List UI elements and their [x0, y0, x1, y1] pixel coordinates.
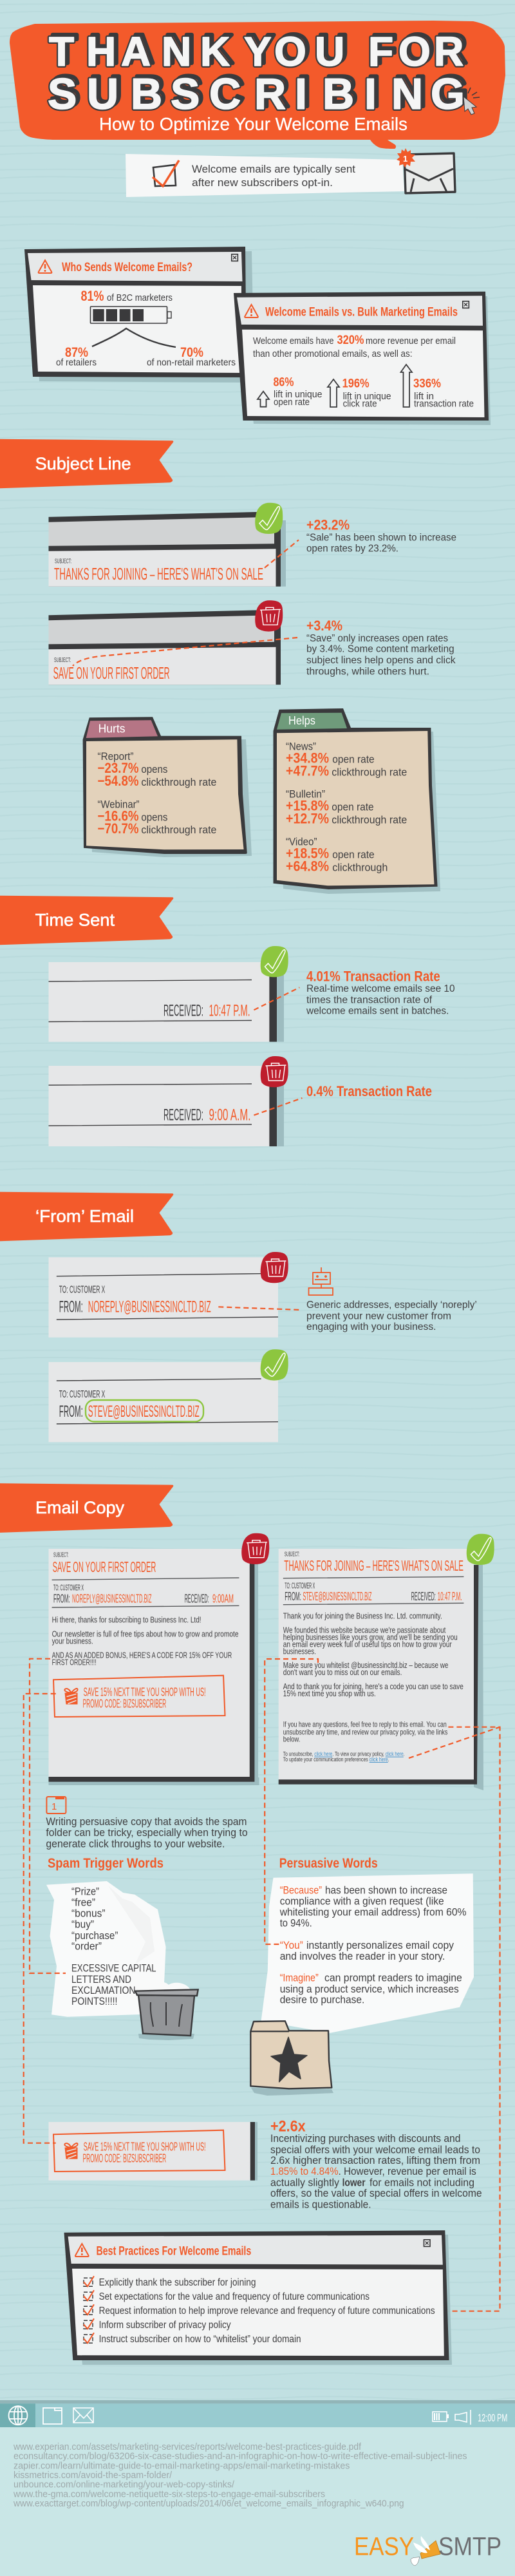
word list: “Prize” — [71, 1886, 99, 1898]
promo box: PROMO CODE: BIZSUBSCRIBER — [83, 1698, 166, 1710]
email body: Thank you for joining the Business Inc. Ltd. community. — [283, 1611, 442, 1620]
webinar stats: clickthrough rate — [141, 824, 216, 836]
incentive stat text: actually slightly — [270, 2177, 340, 2188]
email header — [52, 1552, 239, 1607]
because text: whitelisting your email address) from 60% — [279, 1907, 467, 1918]
addressing: FROM: — [59, 1298, 83, 1316]
email header: 9:00AM — [212, 1592, 234, 1605]
email header: TO: CUSTOMER X — [285, 1581, 315, 1591]
because text: compliance with a given request (like — [280, 1896, 444, 1908]
report stats: −23.7% — [98, 760, 139, 776]
email header: TO: CUSTOMER X — [53, 1582, 84, 1592]
note text: folder can be tricky, especially when trying to — [46, 1827, 248, 1839]
email body — [283, 1611, 464, 1763]
news stats: +34.8% — [286, 750, 329, 766]
sources — [13, 2441, 467, 2509]
email body: Make sure you whitelist @businessincltd.biz – because we — [283, 1661, 448, 1670]
news stats: +47.7% — [286, 762, 329, 779]
email header: NOREPLY@BUSINESSINCLTD.BIZ — [72, 1592, 152, 1605]
title line 2: SUBSCRIBING — [48, 70, 465, 118]
panel: sale subject line — [49, 503, 456, 587]
stat: 81% — [81, 288, 173, 304]
folder: hurts — [83, 717, 252, 857]
email body: don't want you to miss out on our emails. — [283, 1668, 402, 1677]
connector — [254, 1098, 302, 1115]
icon: cursor — [464, 88, 480, 115]
email body: below. — [283, 1735, 300, 1744]
stat text: “Save” only increases open rates — [306, 633, 448, 644]
checklist: Explicitly thank the subscriber for joining — [99, 2277, 256, 2288]
panel: received 10:47 PM — [49, 946, 455, 1042]
title line 1: THANK YOU FOR — [49, 28, 464, 75]
stat: 336% lift: 336% — [413, 377, 441, 391]
incentive stat text: lower — [342, 2177, 366, 2188]
addressing — [59, 1284, 211, 1316]
icon: checkbox — [153, 160, 179, 186]
icon: calendar: 1 — [52, 1801, 57, 1812]
video stats: “Video” — [286, 837, 317, 848]
callout: opt-in note — [126, 148, 455, 197]
stat: 70%: 70% — [180, 345, 203, 360]
panel: welcome vs bulk emails — [234, 292, 491, 425]
title line 2: SUBSCRIBING — [48, 70, 465, 118]
webinar stats: −70.7% — [98, 820, 139, 837]
checklist: Set expectations for the value and frequency of future communications — [99, 2291, 370, 2302]
email body — [52, 1615, 239, 1667]
email body: Hi there, thanks for subscribing to Business Inc. Ltd! — [52, 1615, 201, 1624]
incentive stat text: offers, so the value of special offers in welcome — [270, 2188, 482, 2199]
title line 1: THANK YOU FOR — [49, 28, 464, 75]
incentive stat text — [270, 2117, 482, 2210]
email header: SAVE ON YOUR FIRST ORDER — [53, 1558, 156, 1575]
word list: “bonus” — [71, 1908, 106, 1920]
incentive stat text: 2.6x higher transaction rates, lifting them from — [270, 2155, 480, 2166]
subject text: THANKS FOR JOINING – HERE'S WHAT'S ON SALE — [54, 564, 263, 583]
section banner: from email: ‘From’ Email — [35, 1206, 134, 1226]
promo box: SAVE 15% NEXT TIME YOU SHOP WITH US! — [84, 2140, 206, 2153]
email header: STEVE@BUSINESSINCLTD.BIZ — [303, 1590, 371, 1603]
stat text: 0.4% Transaction Rate — [306, 1083, 432, 1099]
logo: easy smtp: SMTP — [438, 2533, 501, 2561]
dashed connectors — [24, 1659, 500, 2311]
news stats: clickthrough rate — [332, 766, 407, 778]
icon: folder — [43, 2408, 62, 2424]
stat text — [306, 968, 455, 1016]
imagine text: using a product service, which increases — [280, 1984, 459, 1995]
stat text: times the transaction rate of — [306, 994, 433, 1005]
addressing: TO: CUSTOMER X — [59, 1389, 105, 1400]
email body: an email every week full of useful tips on how to grow your — [283, 1640, 452, 1649]
video stats: open rate — [332, 849, 375, 861]
section banner: email copy — [0, 1483, 173, 1533]
webinar stats: “Webinar” — [98, 799, 139, 810]
word list: “purchase” — [71, 1930, 118, 1942]
bulletin stats: +15.8% — [286, 797, 329, 813]
note text: Writing persuasive copy that avoids the spam — [46, 1816, 247, 1828]
promo box: SAVE 15% NEXT TIME YOU SHOP WITH US! — [84, 1685, 206, 1698]
stat text: throughs, while others hurt. — [306, 666, 429, 677]
webinar stats: opens — [141, 811, 167, 823]
connector — [73, 638, 297, 666]
email body: And to thank you for joining, here's a code you can use to save — [283, 1682, 464, 1691]
panel: best practices — [64, 2230, 452, 2365]
word list: “order” — [71, 1941, 102, 1953]
header speech bubble — [10, 21, 505, 149]
icon: green check — [261, 946, 288, 977]
word list: EXCESSIVE CAPITAL — [71, 1963, 156, 1975]
bulletin stats: open rate — [332, 801, 374, 813]
icon: green check — [467, 1534, 494, 1565]
you text: and involves the reader in your story. — [280, 1951, 445, 1962]
branching curve — [92, 328, 176, 347]
incentive stat text: Incentivizing purchases with discounts and — [270, 2133, 460, 2145]
icon: envelope with badge — [397, 148, 455, 193]
panel: personal address — [49, 1349, 288, 1442]
stat: 87%: 87% — [65, 345, 88, 360]
panel: noreply address: NOREPLY@BUSINESSINCLTD.BIZ — [88, 1298, 211, 1316]
incentive stat text: special offers with your welcome email leads to — [270, 2144, 480, 2155]
received label: RECEIVED: — [164, 1106, 203, 1124]
sources: econsultancy.com/blog/63206-six-case-studies-and-an-infographic-on-how-to-write-effective-email-subject-lines — [14, 2451, 467, 2462]
stat: 196% lift — [328, 377, 391, 410]
you text — [280, 1940, 454, 1962]
checklist: Inform subscriber of privacy policy — [99, 2320, 231, 2331]
stat: 86% lift: lift in unique — [274, 389, 322, 400]
icon: green check — [255, 503, 283, 534]
icon: winged envelope — [411, 2536, 440, 2566]
word list — [71, 1886, 156, 2007]
icon: robot — [309, 1267, 333, 1295]
email body: 15% next time you shop with us. — [283, 1689, 376, 1698]
revenue text: more revenue per email — [366, 336, 456, 346]
panel: save subject line — [49, 600, 456, 685]
email header: RECEIVED: — [185, 1592, 209, 1605]
imagine text: desire to purchase. — [280, 1994, 364, 2006]
explanation text: Generic addresses, especially ‘noreply’ — [306, 1300, 477, 1311]
stat text: Real-time welcome emails see 10 — [306, 983, 455, 994]
bulletin stats — [286, 788, 407, 826]
heading: Best Practices For Welcome Emails — [97, 2245, 251, 2259]
icon: warning — [245, 305, 258, 317]
because text: to 94%. — [280, 1918, 312, 1929]
panel: friendly email example: 10:47 P.M. — [438, 1590, 462, 1603]
stat text: subject lines help opens and click — [306, 655, 456, 666]
video stats: clickthrough — [332, 862, 388, 873]
sources: zapier.com/learn/ultimate-guide-to-email-marketing-apps/email-marketing-mistakes — [14, 2460, 350, 2471]
because text: “Because” — [280, 1885, 322, 1897]
email body: businesses. — [283, 1647, 316, 1656]
report stats: opens — [141, 764, 167, 775]
stat: 81%: of B2C marketers — [107, 292, 173, 303]
sources: www.the-gma.com/welcome-netiquette-six-steps-to-engage-email-subscribers — [13, 2488, 325, 2499]
note text: Welcome emails are typically sent — [192, 164, 355, 175]
promo box — [53, 2130, 225, 2172]
stat text: by 3.4%. Some content marketing — [306, 644, 454, 655]
email header — [283, 1551, 464, 1605]
stat text: +23.2% — [306, 517, 350, 533]
stat: 86% lift: 86% — [273, 375, 294, 389]
stat: 87% — [56, 345, 97, 368]
stat: 70%: of non-retail marketers — [147, 357, 236, 368]
stat text: “Sale” has been shown to increase — [306, 532, 456, 543]
heading: spam trigger words: Spam Trigger Words — [48, 1856, 164, 1871]
subject text — [53, 657, 170, 683]
icon: red bin — [261, 1056, 288, 1087]
note text: generate click throughs to your website. — [46, 1838, 225, 1850]
connector — [265, 540, 299, 568]
bulletin stats: +12.7% — [286, 810, 329, 826]
heading: Welcome Emails vs. Bulk Marketing Emails — [265, 306, 458, 319]
icon: envelope with badge: 1 — [403, 154, 407, 164]
title line 2: SUBSCRIBING — [51, 67, 468, 116]
incentive stat text: . However, revenue per email is — [339, 2166, 476, 2177]
news stats — [286, 741, 407, 779]
paper: persuasive words — [261, 1873, 474, 2033]
checklist: Instruct subscriber on how to “whitelist” your domain — [99, 2334, 301, 2345]
sources: www.experian.com/assets/marketing-services/reports/welcome-best-practices-guide.pdf — [13, 2441, 362, 2452]
subject text: SUBJECT: — [54, 657, 71, 664]
stat text: welcome emails sent in batches. — [306, 1005, 449, 1016]
logo: easy smtp — [354, 2533, 501, 2566]
sources: kissmetrics.com/avoid-the-spam-folder/ — [14, 2470, 173, 2481]
panel: who sends welcome emails — [24, 247, 254, 383]
incentive stat text: for emails not including — [370, 2177, 474, 2188]
bulletin stats: clickthrough rate — [332, 814, 407, 826]
panel: received 9:00 AM — [49, 1056, 432, 1146]
promo box — [53, 1676, 225, 1717]
email body: We founded this website because we're passionate about — [283, 1625, 446, 1634]
email header: FROM: — [285, 1590, 301, 1603]
email body: AND AS AN ADDED BONUS, HERE'S A CODE FOR 15% OFF YOUR — [52, 1651, 232, 1660]
news stats: “News” — [286, 741, 316, 752]
icon: star folder — [250, 2021, 333, 2096]
panel: personal address: STEVE@BUSINESSINCLTD.BIZ — [88, 1403, 200, 1421]
imagine text — [280, 1973, 462, 2006]
you text: “You” — [280, 1940, 303, 1951]
video stats — [286, 837, 388, 874]
stat: 86% lift — [258, 375, 322, 408]
stat: 87%: of retailers — [56, 357, 97, 368]
word list: EXCLAMATION — [71, 1985, 135, 1996]
checklist: Request information to help improve relevance and frequency of future communications — [99, 2306, 435, 2316]
promo box: PROMO CODE: BIZSUBSCRIBER — [83, 2152, 166, 2165]
panel: save subject line: SAVE ON YOUR FIRST ORDER — [53, 663, 170, 683]
section banner: time sent: Time Sent — [35, 911, 115, 930]
email header: SUBJECT: — [53, 1552, 68, 1559]
note text — [192, 164, 355, 189]
icon: close — [424, 2240, 430, 2246]
icon: trash can — [135, 1982, 198, 2040]
subject text — [54, 558, 263, 583]
subject text: SUBJECT: — [55, 558, 71, 565]
stat text — [306, 618, 456, 677]
connector — [218, 1307, 301, 1310]
stat text — [306, 517, 456, 554]
because text — [279, 1885, 467, 1929]
because text: has been shown to increase — [325, 1885, 447, 1897]
stat: 81%: 81% — [81, 288, 104, 304]
email body: your business. — [52, 1636, 93, 1645]
icon: red bin — [255, 600, 283, 632]
section banner: subject line: Subject Line — [35, 454, 131, 473]
revenue text — [253, 334, 456, 359]
section banner: time sent — [0, 896, 173, 945]
email body: FIRST ORDER!!!! — [52, 1658, 97, 1667]
panel: incentive offer — [49, 2122, 258, 2181]
tab label: Helps — [288, 714, 315, 727]
imagine text: “Imagine” — [280, 1973, 319, 1984]
word list: POINTS!!!!! — [71, 1996, 117, 2007]
icon: warning — [39, 260, 52, 273]
received label: RECEIVED: — [164, 1001, 203, 1019]
tab label: Hurts — [98, 722, 126, 735]
email body: To unsubscribe, click here. To view our privacy policy, click here. — [283, 1751, 405, 1758]
addressing: TO: CUSTOMER X — [59, 1284, 105, 1295]
panel: generic email example — [49, 1533, 269, 1785]
sources: www.exacttarget.com/blog/wp-content/uploads/2014/06/et_welcome_emails_infographic_w640.png — [13, 2498, 404, 2509]
report stats: −54.8% — [98, 773, 139, 789]
icon: close — [232, 254, 238, 261]
revenue text: Welcome emails have — [253, 336, 333, 346]
icon: warning — [75, 2244, 89, 2257]
taskbar — [0, 2400, 515, 2427]
bulletin stats: “Bulletin” — [286, 788, 325, 800]
connector — [254, 987, 299, 1010]
stat text: open rates by 23.2%. — [306, 544, 398, 554]
word list: LETTERS AND — [71, 1974, 131, 1985]
paper: spam words — [46, 1881, 166, 2017]
stat: 70% — [147, 345, 236, 368]
webinar stats — [98, 799, 216, 837]
video stats: +64.8% — [286, 858, 329, 874]
explanation text: engaging with your business. — [306, 1321, 436, 1332]
heading: Who Sends Welcome Emails? — [62, 261, 192, 274]
stat text: +3.4% — [306, 618, 342, 634]
report stats — [98, 751, 216, 789]
panel: noreply address — [49, 1252, 477, 1338]
video stats: +18.5% — [286, 846, 329, 862]
imagine text: can prompt readers to imagine — [324, 1973, 462, 1984]
revenue text: than other promotional emails, as well as: — [253, 348, 412, 359]
explanation text — [306, 1300, 477, 1332]
icon: battery — [90, 307, 171, 323]
email body: If you have any questions, feel free to reply to this email. You can — [283, 1720, 447, 1729]
stat: 196% lift: click rate — [343, 399, 377, 410]
footer background — [0, 2427, 515, 2576]
subtitle: How to Optimize Your Welcome Emails — [99, 114, 407, 134]
email body: unsubscribe any time, and review our privacy policy, via the links — [283, 1727, 447, 1736]
email body: Our newsletter is full of free tips about how to grow and promote — [52, 1629, 239, 1638]
sources: unbounce.com/online-marketing/your-web-copy-stinks/ — [14, 2479, 235, 2490]
news stats: open rate — [332, 753, 375, 765]
addressing: FROM: — [59, 1403, 83, 1421]
icon: calendar — [46, 1796, 66, 1814]
report stats: clickthrough rate — [141, 777, 216, 788]
heading: persuasive words: Persuasive Words — [279, 1856, 378, 1871]
title line 1: THANK YOU FOR — [52, 26, 467, 72]
intro note with calendar icon — [46, 1796, 248, 1850]
section banner: email copy: Email Copy — [35, 1498, 124, 1517]
icon: speaker — [455, 2410, 471, 2425]
email body: To update your communication preferences click here. — [283, 1756, 389, 1763]
note text: after new subscribers opt-in. — [192, 177, 333, 189]
word list: “buy” — [71, 1919, 94, 1931]
section banner: subject line — [0, 439, 173, 488]
stat: 196% lift: lift in unique — [343, 391, 391, 402]
icon: red bin — [241, 1533, 269, 1564]
addressing — [59, 1389, 200, 1421]
icon: envelope — [73, 2408, 93, 2423]
checklist — [84, 2276, 435, 2345]
received label: 10:47 P.M. — [209, 1001, 250, 1019]
stat: 336% lift: lift in — [414, 391, 434, 402]
report stats: “Report” — [98, 751, 134, 762]
email header: RECEIVED: — [411, 1590, 436, 1603]
incentive stat text: emails is questionable. — [270, 2199, 371, 2210]
logo: easy smtp: EASY — [354, 2533, 414, 2561]
revenue text: 320% — [337, 334, 364, 347]
you text: instantly personalizes email copy — [306, 1940, 454, 1951]
word list: “free” — [71, 1897, 95, 1909]
icon: globe — [9, 2406, 27, 2425]
icon: battery — [433, 2412, 449, 2421]
stat: 196% lift: 196% — [342, 377, 370, 391]
email header: FROM: — [53, 1592, 70, 1605]
email body: helping businesses like yours grow, and we'll be sending you — [283, 1633, 458, 1642]
incentive stat text: +2.6x — [270, 2117, 306, 2135]
email header: SUBJECT: — [285, 1551, 299, 1558]
icon: close — [463, 301, 469, 308]
webinar stats: −16.6% — [98, 808, 139, 824]
icon: green check — [261, 1349, 288, 1381]
explanation text: prevent your new customer from — [306, 1311, 451, 1321]
stat: 86% lift: open rate — [274, 397, 310, 408]
highlight ring — [86, 1400, 203, 1422]
note text — [46, 1816, 248, 1850]
stat: 336% lift: transaction rate — [414, 399, 474, 410]
section banner: from email — [0, 1192, 173, 1241]
panel: friendly email example — [279, 1534, 494, 1790]
incentive stat text: 1.85% to 4.84% — [270, 2166, 339, 2177]
icon: red bin — [261, 1252, 288, 1283]
stat: 336% lift — [400, 365, 474, 410]
stat text: 4.01% Transaction Rate — [306, 968, 440, 984]
folder: helps — [273, 708, 440, 894]
received label: 9:00 A.M. — [209, 1106, 251, 1124]
